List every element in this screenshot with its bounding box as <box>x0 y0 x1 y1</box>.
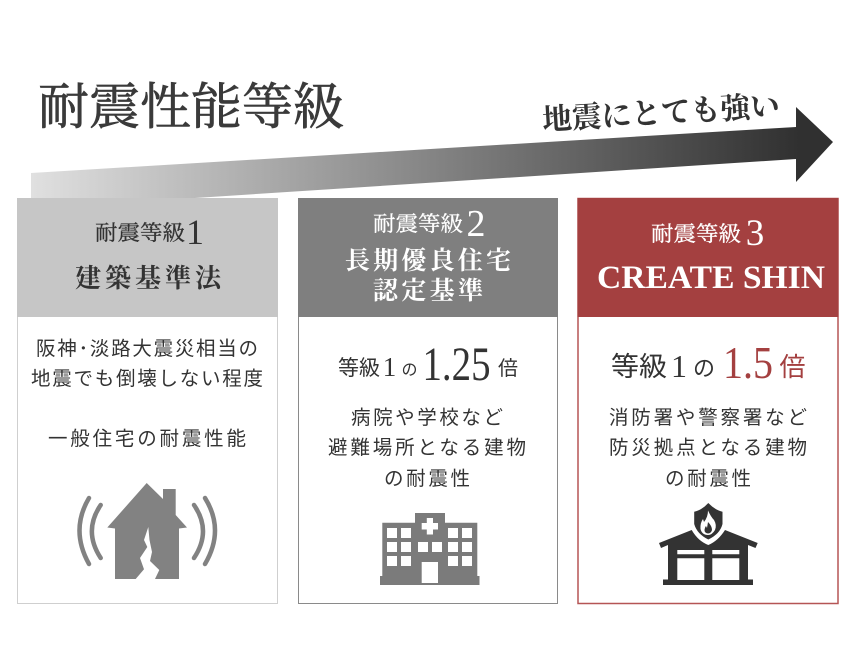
grade 1 label: 耐震等級 <box>95 221 185 245</box>
grade 1 description: 一般住宅の耐震性能 <box>48 428 246 450</box>
grade 3 label: 3 <box>746 213 764 254</box>
title: 耐震性能等級 <box>38 79 344 135</box>
arrow: stronger against earthquakes <box>31 107 833 198</box>
panel 3 body <box>578 198 838 604</box>
grade 1 label <box>95 212 204 252</box>
grade 3 multiplier: 1 <box>671 348 687 384</box>
icon: hospital <box>380 513 480 585</box>
grade 3 label <box>651 213 764 254</box>
grade 3 description: の耐震性 <box>665 468 751 490</box>
arrow label: 地震にとても強い <box>541 90 781 137</box>
grade 1 standard: 建築基準法 <box>75 264 223 293</box>
grade 3 multiplier: 等級 <box>611 352 667 382</box>
panel: grade 1 <box>17 198 278 604</box>
grade 3 description: 防災拠点となる建物 <box>609 437 807 459</box>
grade 2 multiplier: 等級 <box>338 357 380 380</box>
grade 1 description <box>31 338 263 450</box>
grade 2 description: 病院や学校など <box>351 407 503 429</box>
grade 2 multiplier: 1 <box>383 352 396 382</box>
grade 3 description: 消防署や警察署など <box>609 407 807 429</box>
grade 1 label: 1 <box>186 212 204 252</box>
grade 2 multiplier: 倍 <box>498 357 518 380</box>
grade 3 multiplier: 倍 <box>779 352 806 382</box>
grade 2 multiplier: の <box>401 362 418 379</box>
grade 2 description: 避難場所となる建物 <box>328 437 526 459</box>
grade 2 standard: 長期優良住宅 <box>345 247 511 275</box>
panel 2 header <box>298 198 558 317</box>
grade 2 multiplier <box>338 338 518 391</box>
grade 3 brand: CREATE SHIN <box>597 260 825 296</box>
icon: cracked house with vibration <box>80 483 215 579</box>
grade 2 label: 2 <box>466 203 486 245</box>
grade 1 description: 地震でも倒壊しない程度 <box>31 368 263 390</box>
grade 3 multiplier: 1.5 <box>723 337 773 388</box>
grade 2 label <box>373 203 486 245</box>
grade 3 multiplier: の <box>693 356 715 381</box>
grade 2 multiplier: 1.25 <box>422 338 490 391</box>
grade 3 label: 耐震等級 <box>651 222 741 246</box>
grade 2 standard: 認定基準 <box>373 277 483 305</box>
grade 2 description <box>328 407 526 490</box>
panel 3 header <box>578 198 838 317</box>
panel 2 body <box>298 198 558 604</box>
grade 3 description <box>609 407 807 490</box>
grade 2 description: の耐震性 <box>384 468 470 490</box>
grade 2 standard <box>345 247 511 305</box>
grade 2 label: 耐震等級 <box>373 212 463 236</box>
icon: fire station <box>659 503 758 585</box>
grade 3 multiplier <box>611 337 806 388</box>
panel 1 header <box>17 198 278 317</box>
panel 1 body <box>18 198 278 604</box>
grade 1 description: 阪神･淡路大震災相当の <box>36 338 258 360</box>
panel: grade 2 <box>298 198 558 604</box>
panel: grade 3 <box>578 198 838 604</box>
